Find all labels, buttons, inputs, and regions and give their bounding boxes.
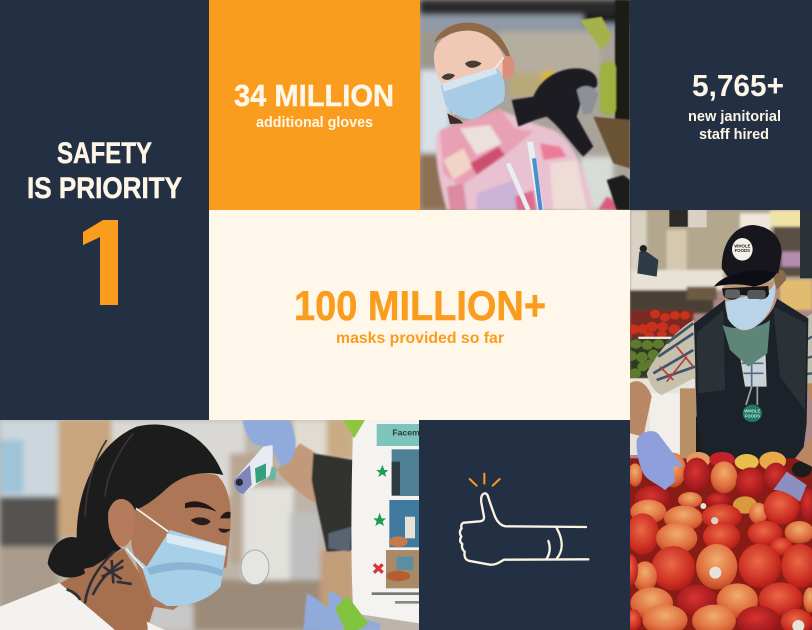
stat: 100 million+: 100 MILLION+ — [294, 282, 546, 329]
photo: produce worker with apples — [622, 210, 812, 630]
photo: worker having temperature taken: Facem — [392, 428, 420, 438]
panel: safety is priority 1 — [28, 142, 182, 305]
icon: thumbs up hand — [460, 474, 588, 565]
photo: produce worker with apples: FOODS — [745, 413, 760, 418]
stat: 34 million: 34 MILLION — [234, 79, 394, 113]
caption: additional gloves: additional gloves — [256, 115, 373, 131]
big number 1: 1 — [72, 199, 134, 330]
icon: orange sparkle rays — [470, 474, 500, 486]
caption: masks provided so far: masks provided so far — [336, 330, 504, 347]
heading: safety is priority — [27, 137, 182, 205]
caption: new janitorial staff hired — [688, 109, 781, 143]
caption: new janitorial staff hired: new janitorial — [688, 109, 781, 125]
photo: worker in plaid shirt with black glove — [420, 0, 630, 210]
panel: thumbs up — [419, 420, 630, 630]
panel: 100 million masks — [209, 210, 630, 420]
photo: produce worker with apples: FOODS — [735, 248, 750, 253]
photo: worker having temperature taken — [0, 420, 420, 630]
heading: safety is priority: SAFETY — [57, 137, 152, 170]
stat: 5,765+: 5,765+ — [692, 69, 784, 103]
panel: janitorial staff — [630, 0, 812, 210]
heading: safety is priority: IS PRIORITY — [27, 172, 182, 205]
panel: 34 million gloves — [209, 0, 420, 210]
photo: produce worker with apples: WHOLE — [744, 409, 760, 414]
photo: produce worker with apples: WHOLE — [734, 243, 750, 248]
caption: new janitorial staff hired: staff hired — [699, 127, 769, 143]
